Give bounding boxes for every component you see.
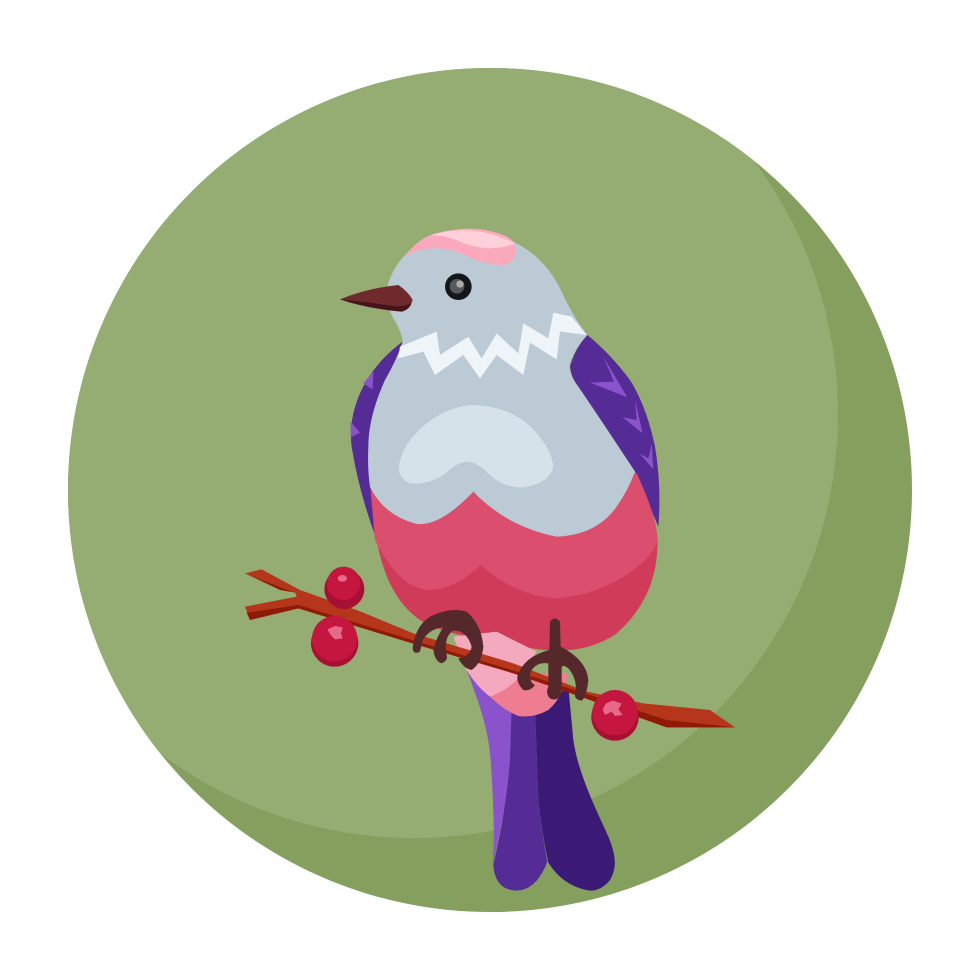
berry bbox=[324, 567, 364, 609]
bird tail bbox=[467, 670, 615, 891]
bird wings bbox=[351, 335, 659, 540]
belly highlight bbox=[399, 405, 553, 487]
head cap bbox=[405, 229, 516, 265]
bird feet bbox=[413, 610, 588, 701]
branch with berries bbox=[245, 567, 735, 741]
branch bbox=[245, 569, 735, 727]
eye bbox=[445, 273, 472, 300]
white neck zigzag bbox=[398, 313, 587, 378]
berry bbox=[311, 616, 358, 667]
bird grey body and head bbox=[340, 229, 635, 537]
right wing bbox=[570, 335, 659, 527]
undertail feathers bbox=[453, 632, 568, 717]
beak bbox=[340, 285, 413, 312]
background circle bbox=[68, 68, 912, 912]
bird red belly bbox=[370, 473, 657, 651]
left foot bbox=[413, 610, 483, 670]
left wing bbox=[351, 342, 403, 540]
right foot bbox=[517, 618, 588, 701]
berry bbox=[591, 690, 639, 741]
